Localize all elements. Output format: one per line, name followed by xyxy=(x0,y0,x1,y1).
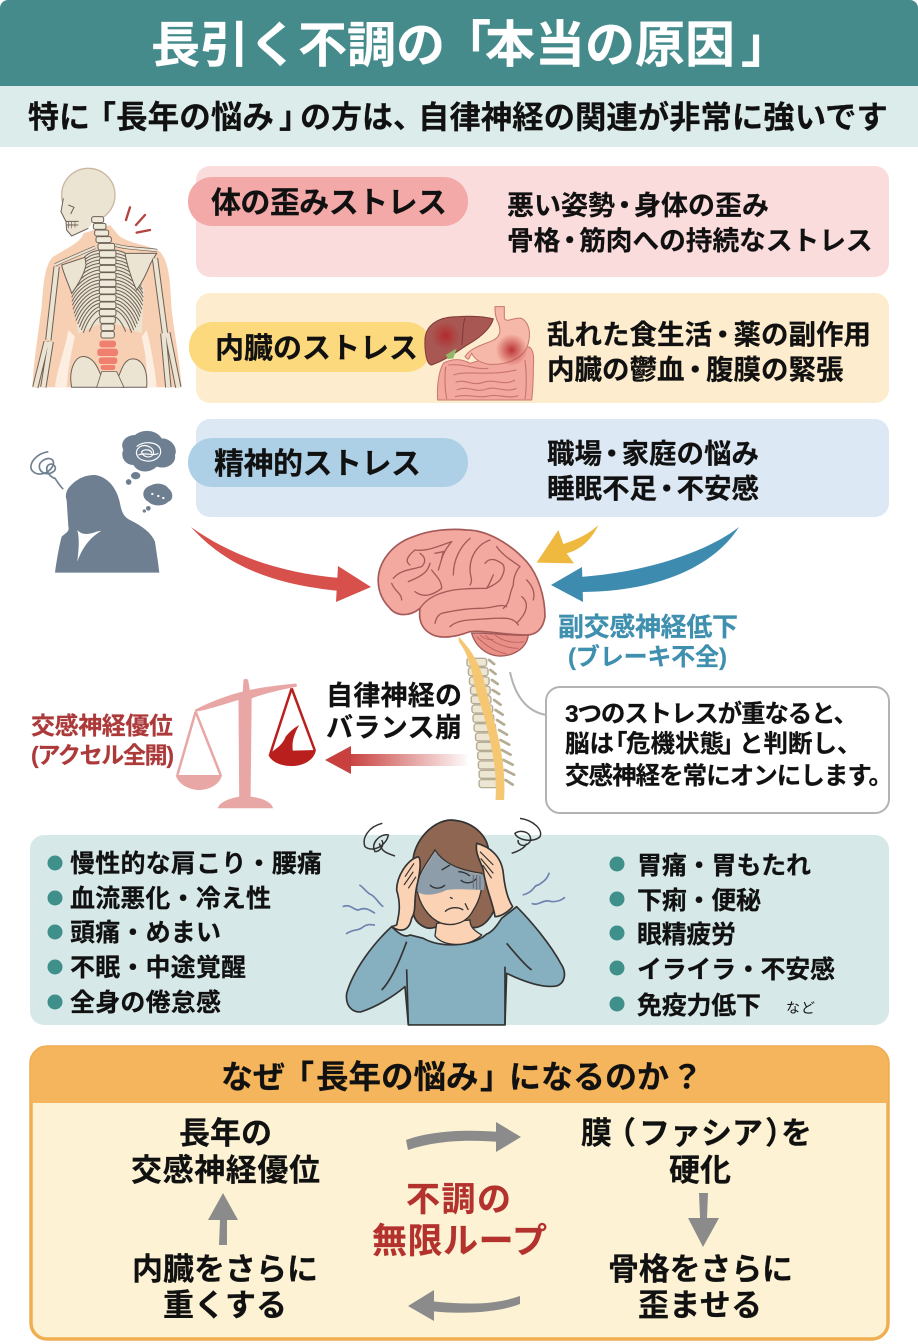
list: right symptoms: 下痢・便秘 xyxy=(637,887,761,915)
callout xyxy=(510,672,893,813)
node: heavier organs xyxy=(132,1252,318,1323)
text: sympathetic dominant: 交感神経優位 xyxy=(31,713,173,740)
callout: 交感神経を常にオンにします。 xyxy=(565,762,893,790)
text: parasympathetic: 副交感神経低下 xyxy=(558,612,738,642)
callout: 脳は xyxy=(565,730,614,758)
icon: balance scale xyxy=(176,679,316,808)
node: fascia: （ xyxy=(605,1116,636,1151)
pill: body distortion xyxy=(188,177,468,226)
node: more skeletal distortion: 歪ませる xyxy=(638,1288,762,1323)
text: visceral causes: 内臓の鬱血・腹膜の緊張 xyxy=(547,354,844,385)
cerebrum xyxy=(378,529,545,637)
cerebellum xyxy=(472,633,528,656)
callout: と判断し、 xyxy=(739,730,862,758)
pill: mental xyxy=(188,438,468,487)
panel: mental stress xyxy=(188,419,889,517)
text: autonomic imbalance: 自律神経の xyxy=(326,681,462,711)
text: infinite loop: 無限ループ xyxy=(372,1222,547,1261)
subtitle banner: 」 xyxy=(279,100,310,135)
list: right symptoms: 眼精疲労 xyxy=(637,921,736,949)
header: why: なぜ xyxy=(221,1059,285,1095)
subtitle banner xyxy=(0,86,918,147)
list: right symptoms: 免疫力低下 xyxy=(637,992,761,1020)
list: left symptoms xyxy=(48,850,322,1017)
header: why: 「 xyxy=(282,1059,314,1095)
icon: woman with headache xyxy=(343,818,565,1025)
subtitle banner: 「 xyxy=(85,100,116,135)
header: why: ？ xyxy=(671,1059,703,1095)
text: body distortion causes: 骨格・筋肉への持続なストレス xyxy=(507,226,873,256)
header: why: 」 xyxy=(480,1059,512,1095)
text: mental causes: 職場・家庭の悩み xyxy=(547,438,759,469)
text: autonomic imbalance: バランス崩 xyxy=(326,713,462,743)
list: left symptoms: 慢性的な肩こり・腰痛 xyxy=(70,850,322,878)
arrow: fading red left xyxy=(325,746,467,774)
text: infinite loop xyxy=(372,1181,547,1261)
pill: visceral: 内臓のストレス xyxy=(215,332,418,365)
node: long-term sympathetic: 長年の xyxy=(179,1116,272,1151)
text: mental causes: 睡眠不足・不安感 xyxy=(547,473,759,504)
node: long-term sympathetic xyxy=(131,1116,320,1188)
node: heavier organs: 内臓をさらに xyxy=(132,1252,318,1287)
pill: body distortion: 体の歪みストレス xyxy=(211,187,447,220)
icon: brain and spine xyxy=(378,529,545,800)
list: left symptoms: 全身の倦怠感 xyxy=(70,989,221,1017)
text: visceral causes: 乱れた食生活・薬の副作用 xyxy=(547,319,871,350)
callout: 」 xyxy=(721,731,746,758)
node: fascia: ） xyxy=(765,1116,796,1151)
title banner: 」 xyxy=(741,17,791,73)
text: body distortion causes xyxy=(507,191,873,256)
text: parasympathetic xyxy=(558,612,738,671)
arrow: red from body xyxy=(191,527,371,602)
node: fascia: ファシア xyxy=(639,1116,763,1151)
header: why: になるのか xyxy=(509,1059,669,1095)
callout: 「 xyxy=(603,730,628,758)
arrow: left xyxy=(208,1193,238,1245)
header: why: 長年の悩み xyxy=(316,1059,479,1095)
node: fascia: を xyxy=(781,1116,812,1151)
text: sympathetic dominant: (アクセル全開) xyxy=(31,742,174,768)
pill: visceral xyxy=(189,322,431,372)
header: why xyxy=(31,1047,888,1103)
text: autonomic imbalance xyxy=(326,681,462,743)
subtitle banner: 特に xyxy=(28,100,90,135)
icon: skeleton back view xyxy=(32,168,182,387)
list: right symptoms: イライラ・不安感 xyxy=(637,956,835,984)
text: sympathetic dominant xyxy=(31,713,174,768)
node: heavier organs: 重くする xyxy=(163,1288,287,1323)
node: fascia: 膜 xyxy=(581,1116,612,1151)
arrow: bottom xyxy=(408,1290,520,1321)
text: mental causes xyxy=(547,438,759,504)
list: left symptoms: 不眠・中途覚醒 xyxy=(70,954,246,982)
text: body distortion causes: 悪い姿勢・身体の歪み xyxy=(507,191,769,221)
list: right symptoms xyxy=(610,852,835,1020)
node: long-term sympathetic: 交感神経優位 xyxy=(131,1153,320,1188)
list: right symptoms: など xyxy=(786,1000,815,1016)
title banner: 「 xyxy=(441,17,491,73)
pill: mental: 精神的ストレス xyxy=(214,448,421,481)
text: parasympathetic: (ブレーキ不全) xyxy=(568,643,727,671)
panel: symptoms xyxy=(30,835,889,1025)
panel: visceral stress xyxy=(189,293,889,403)
arrow: yellow from organs xyxy=(537,525,598,563)
callout: 危機状態 xyxy=(626,730,724,758)
list: left symptoms: 頭痛・めまい xyxy=(70,919,221,947)
list: right symptoms: 胃痛・胃もたれ xyxy=(637,852,811,880)
subtitle banner: の方は、 xyxy=(300,100,424,135)
node: more skeletal distortion xyxy=(608,1252,793,1323)
icon: worried person xyxy=(31,431,176,573)
list: left symptoms: 血流悪化・冷え性 xyxy=(70,885,271,913)
title banner: 長引く不調の xyxy=(151,19,445,73)
panel: why it becomes chronic xyxy=(31,1047,888,1339)
text: visceral causes xyxy=(547,319,871,385)
arrow: right xyxy=(688,1193,719,1247)
panel: body distortion stress xyxy=(188,166,889,277)
subtitle banner: 自律神経の関連が非常に強いです xyxy=(418,99,888,135)
title banner: 本当の原因 xyxy=(485,17,735,73)
spine column xyxy=(459,637,514,800)
node: more skeletal distortion: 骨格をさらに xyxy=(608,1252,793,1287)
node: fascia xyxy=(581,1116,812,1188)
arrow: top xyxy=(406,1122,521,1152)
text: infinite loop: 不調の xyxy=(406,1181,511,1219)
callout: 3つのストレスが重なると、 xyxy=(565,699,858,728)
node: fascia: 硬化 xyxy=(669,1153,731,1188)
icon: organs xyxy=(425,307,534,400)
subtitle banner: 長年の悩み xyxy=(116,99,274,135)
arrow: blue from mind xyxy=(551,527,739,602)
title banner xyxy=(0,0,918,86)
